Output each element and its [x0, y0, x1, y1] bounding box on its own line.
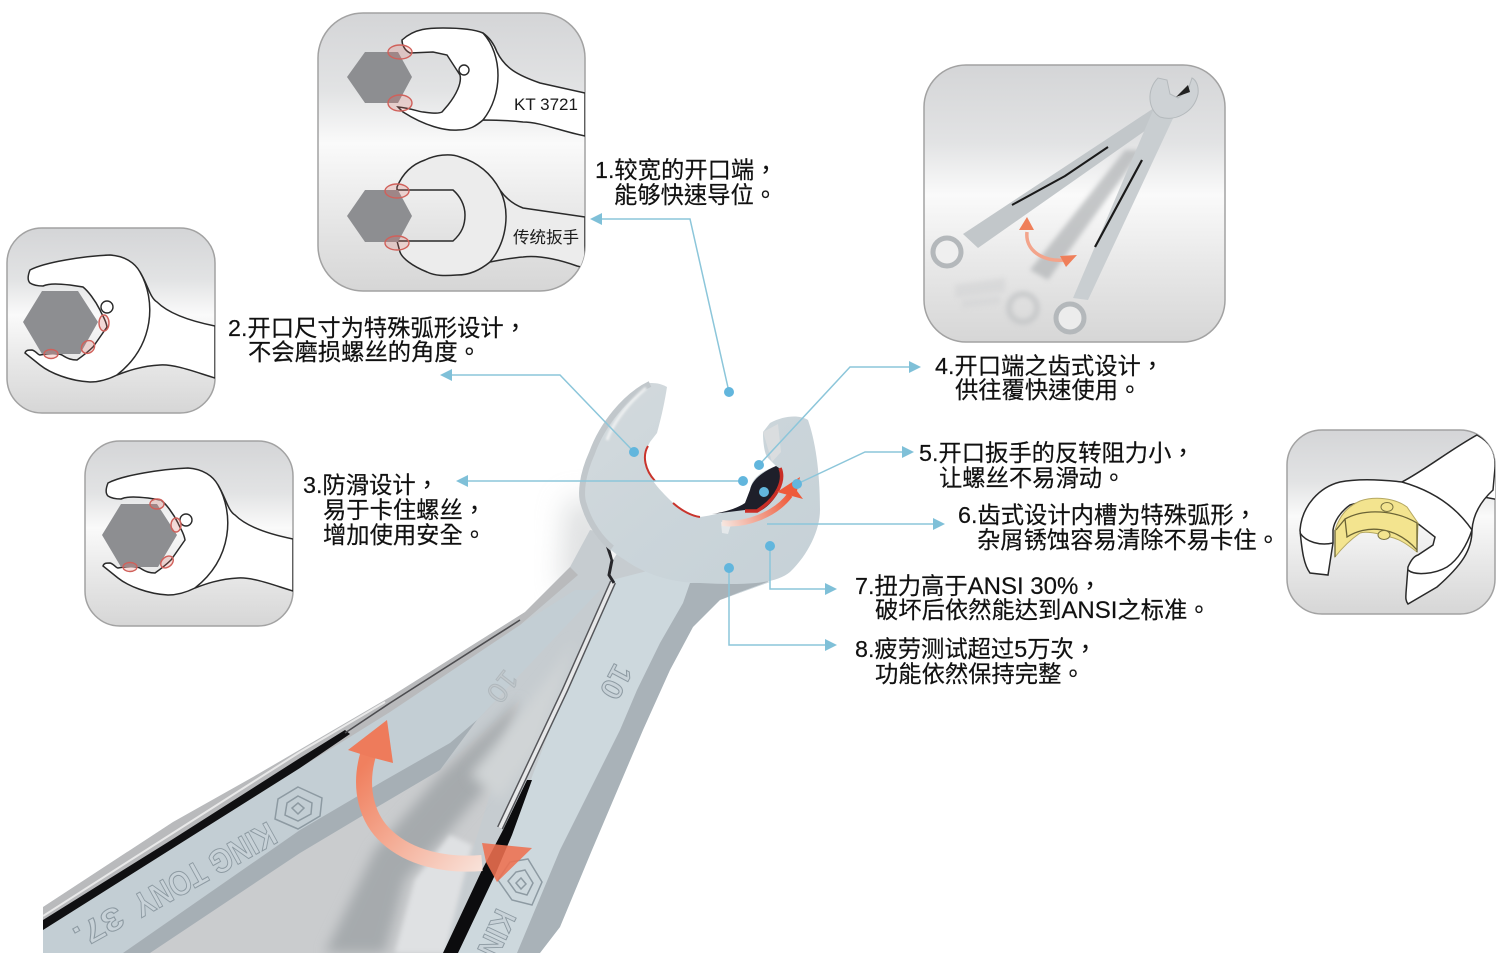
text 4 [935, 353, 1164, 403]
text 5 [919, 440, 1195, 491]
motion-blurred middle wrench [955, 150, 1142, 322]
right edge strip [517, 581, 770, 953]
text 2: 不会磨损螺丝的角度。 [248, 339, 481, 365]
main photo: chrome combination wrenches [40, 383, 820, 953]
text 5: 5.开口扳手的反转阻力小， [919, 440, 1195, 466]
left black stripe [43, 730, 350, 930]
panel 6: inner groove detail [1286, 429, 1496, 615]
callout 4 leader line [754, 361, 921, 470]
text 7: 破坏后依然能达到ANSI之标准。 [875, 597, 1211, 624]
wrench outline [103, 468, 293, 595]
red tooth marks [745, 468, 782, 511]
neck squiggle [607, 545, 614, 583]
wrench shafts [40, 530, 800, 953]
yellow inner groove [1335, 498, 1418, 557]
hexagon bolt [23, 291, 98, 354]
panel 2: special arc jaw [7, 228, 215, 413]
panel 4: swinging wrench quick use [924, 65, 1225, 342]
text 7 [855, 573, 1211, 624]
shaft middle area [150, 700, 520, 953]
text 6: 6.齿式设计内槽为特殊弧形， [958, 502, 1257, 528]
right chrome lines [500, 582, 613, 828]
KT 3721 wrench outline [398, 28, 585, 136]
text 5: 让螺丝不易滑动。 [939, 465, 1125, 491]
engraved size marking: left wrench: 10 [481, 664, 525, 709]
left wrench [963, 104, 1166, 248]
text 6 [958, 502, 1280, 553]
text 8: 8.疲劳测试超过5万次， [855, 636, 1097, 662]
text 7: 7.扭力高于ANSI 30%， [855, 573, 1102, 600]
text 8 [855, 636, 1097, 687]
text 1: 能够快速导位。 [614, 182, 777, 208]
traditional wrench outline [397, 155, 585, 276]
text 6: 杂屑锈蚀容易清除不易卡住。 [977, 527, 1280, 553]
left chrome edge [43, 567, 578, 930]
small red rotation arrow [722, 495, 790, 523]
icon: brand logo on left wrench [275, 787, 322, 829]
band shadow strip [123, 720, 477, 953]
text 3: 3.防滑设计， [303, 472, 439, 498]
large orange swing arrow [348, 720, 532, 882]
notch [721, 521, 732, 534]
hexagon bolt [102, 504, 177, 567]
text 4: 供往覆快速使用。 [955, 377, 1141, 403]
right wrench band [458, 560, 770, 953]
panel 1: KT 3721 vs traditional wrench [318, 13, 585, 291]
text 3 [303, 472, 486, 548]
panel 3: anti-slip design [85, 441, 293, 626]
callout 7 leader line [765, 541, 837, 595]
text 2 [228, 315, 527, 365]
callout 5 leader line [792, 446, 914, 489]
right wrench [1073, 108, 1176, 300]
callout 6 leader line [759, 487, 945, 530]
wrench head [1150, 78, 1198, 118]
callout 8 leader line [724, 563, 837, 651]
callout 1 leader line [590, 213, 734, 397]
wrench label: traditional wrench: 传统扳手 [513, 228, 579, 247]
right black stripe [443, 780, 532, 953]
callout 2 leader line [440, 369, 639, 457]
text 3: 易于卡住螺丝， [323, 497, 486, 523]
open-end head of main wrench [580, 383, 820, 584]
wrench outline [25, 255, 215, 382]
text 1: 1.较宽的开口端， [595, 157, 778, 183]
wrench label: KT 3721: KT 3721 [514, 95, 578, 114]
callout 3 leader line [456, 475, 748, 487]
soft shadow behind shafts [560, 500, 612, 590]
wrench outline [1402, 434, 1495, 500]
engraved brand text: left wrench: KING TONY [126, 814, 283, 924]
left wrench band [43, 590, 600, 953]
engraved size marking: right wrench: 10 [593, 659, 638, 704]
text 8: 功能依然保持完整。 [875, 661, 1085, 687]
text 4: 4.开口端之齿式设计， [935, 353, 1164, 379]
hexagon bolt [347, 52, 412, 103]
text 3: 增加使用安全。 [323, 522, 486, 548]
text 2: 2.开口尺寸为特殊弧形设计， [228, 315, 527, 341]
icon: brand logo on right wrench [498, 859, 542, 905]
text 1 [595, 157, 778, 208]
small orange swing arrow [1027, 232, 1065, 260]
engraved model text: left wrench: 37. [67, 899, 130, 953]
